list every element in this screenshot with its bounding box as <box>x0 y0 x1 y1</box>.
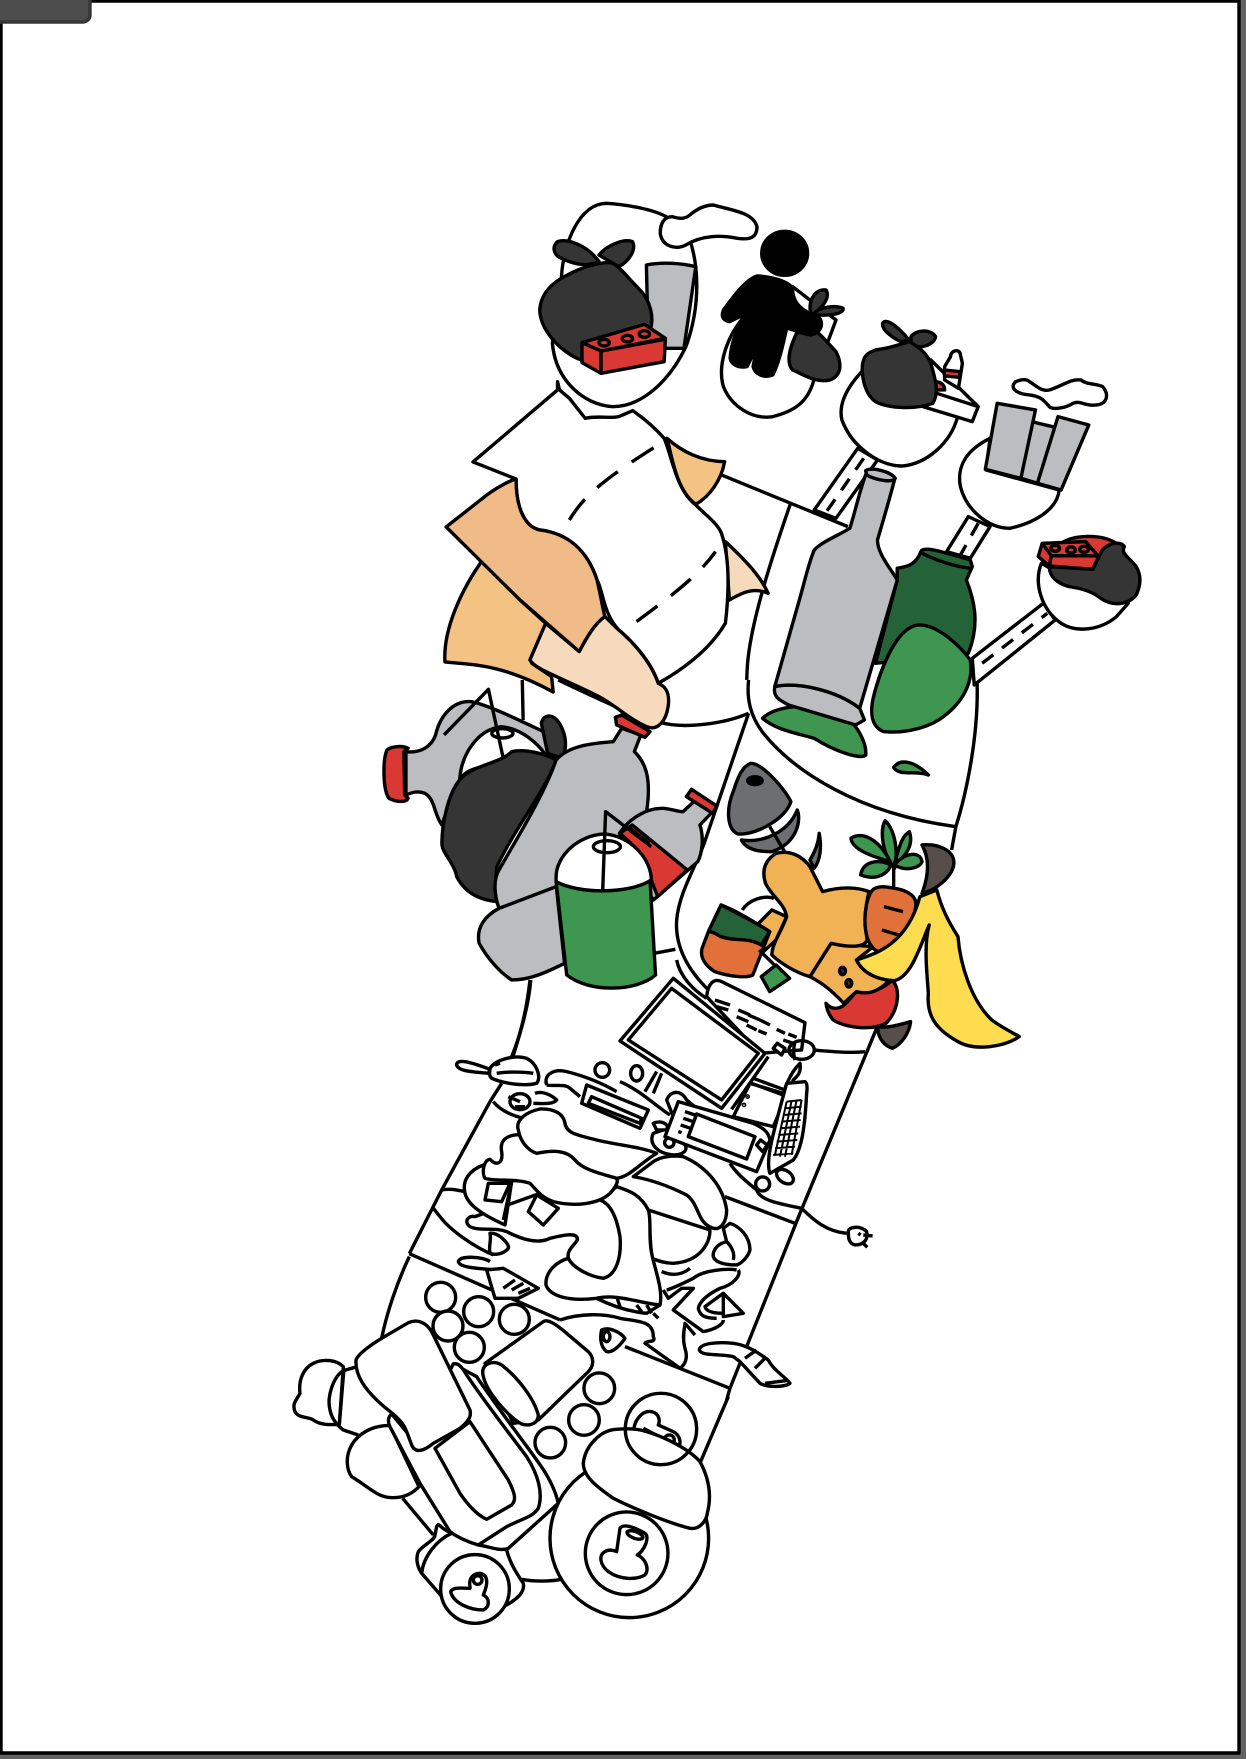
icon: trash bag <box>442 716 565 902</box>
top-left tab <box>0 0 90 22</box>
icon: tea tag <box>759 950 790 992</box>
road: lower section lines <box>409 980 877 1400</box>
icon: remote loop <box>652 1122 686 1155</box>
icon: striped strip <box>597 1288 723 1332</box>
panel: food and organic waste <box>702 706 1019 1048</box>
panel: electronic waste <box>457 960 873 1247</box>
icon: gray jug <box>384 689 556 825</box>
icon: monitor <box>620 978 768 1117</box>
connector strip 2 <box>947 517 990 558</box>
icon: apple core <box>810 943 911 1048</box>
icon: tube <box>699 1343 790 1386</box>
icon: small leaf <box>894 762 928 775</box>
bubble 4: factory <box>960 380 1107 528</box>
panel: cans and metal waste <box>294 1257 728 1623</box>
bubble 1: bag, brick and building <box>540 203 757 407</box>
icon: small can lying left <box>417 1525 562 1623</box>
panel: household and paper waste <box>445 203 1140 732</box>
road: middle section lines <box>513 680 977 1057</box>
icon: paper scraps behind sheet <box>445 438 768 692</box>
icon: juice jar <box>702 905 770 977</box>
icon: metal balls <box>426 1282 615 1458</box>
icon: banana peel <box>856 845 1019 1047</box>
icon: red label bottle <box>620 789 717 900</box>
connector strip 1 <box>814 448 877 518</box>
icon: cloth pile <box>464 1109 727 1305</box>
icon: paper sheet <box>677 960 805 1053</box>
panel: plastic waste <box>384 689 717 988</box>
icon: big can <box>550 1393 710 1618</box>
icon: light paper <box>530 617 669 728</box>
icon: orange paper <box>446 479 605 652</box>
icon: carrot <box>851 821 922 952</box>
bubble 5: brick and bag <box>1038 536 1140 629</box>
icon: fish shape <box>560 1298 695 1368</box>
icon: left clouds <box>294 1360 433 1535</box>
icon: tag <box>458 1257 538 1298</box>
icon: cup <box>483 1321 593 1425</box>
icon: gray bottle <box>478 715 650 980</box>
icon: long carton <box>356 1321 558 1549</box>
icon: green scrap <box>763 706 866 756</box>
connector strip 3 <box>972 603 1055 685</box>
icon: cable with plug <box>730 1163 873 1247</box>
icon: tower computer <box>733 1063 800 1127</box>
icon: green cup <box>556 812 656 988</box>
icon: green bottle <box>872 549 975 732</box>
icon: fish head <box>729 763 791 834</box>
icon: gray glass bottle <box>774 469 897 725</box>
icon: tangled cables <box>457 1057 670 1115</box>
icon: keyboard <box>769 1082 807 1173</box>
road: upper section lines <box>721 475 848 680</box>
bubble 3: bag and paper <box>841 321 978 466</box>
icon: small connector <box>773 1041 814 1060</box>
icon: twisted cloth <box>667 1269 743 1318</box>
icon: vcr device <box>582 1085 648 1128</box>
bubble 2: person with bag <box>722 231 843 417</box>
icon: fish bones <box>741 810 820 868</box>
icon: sleeve roll <box>713 1223 750 1265</box>
panel: textile waste <box>458 1109 790 1386</box>
icon: printer device <box>665 1102 770 1172</box>
icon: paper sheet with dashed fold <box>473 382 728 683</box>
icon: food scrap body <box>742 852 869 977</box>
